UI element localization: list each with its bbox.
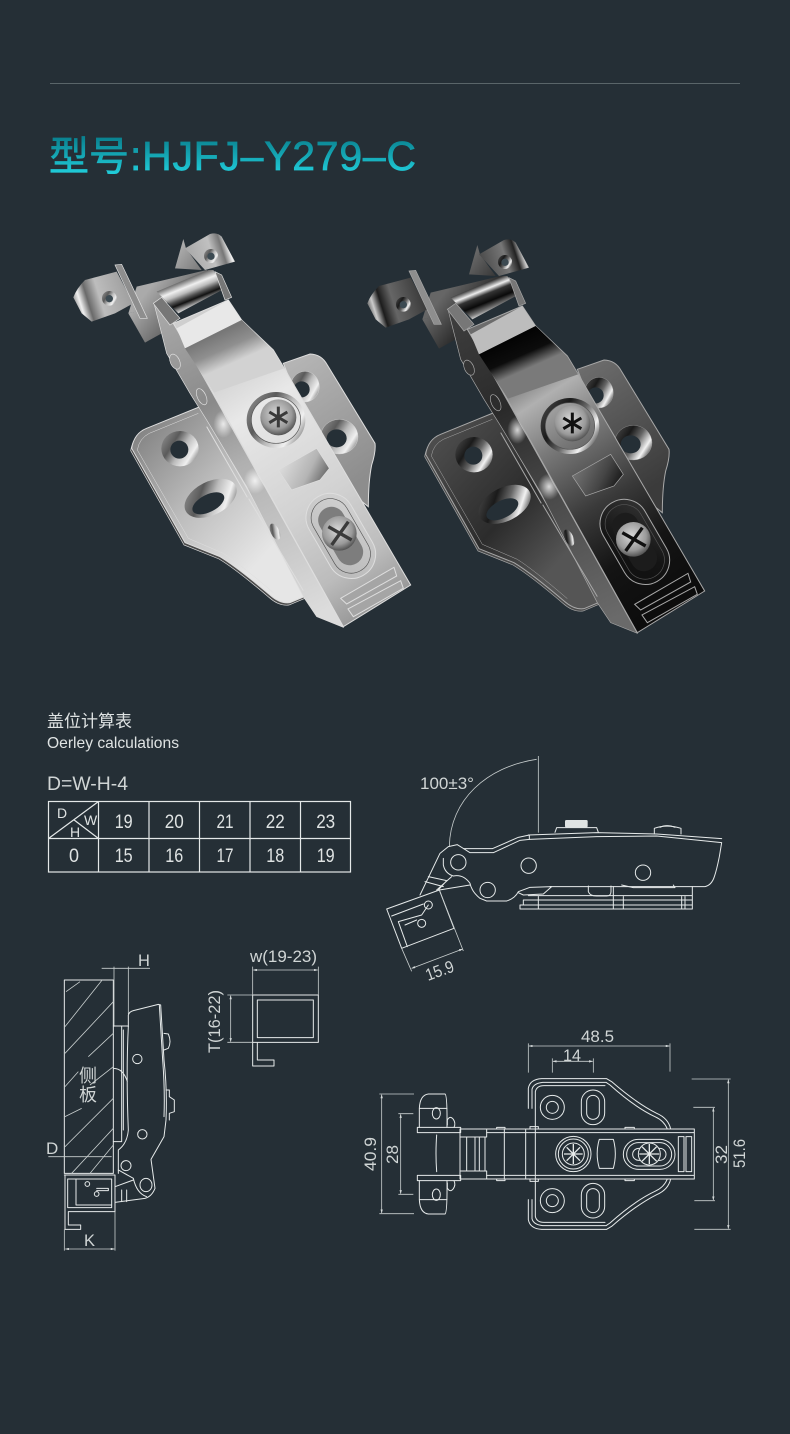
top view drawing with dimensions: 28 [383, 1145, 402, 1164]
top view drawing with dimensions: 14 [563, 1046, 581, 1065]
side view drawing with opening angle [387, 756, 722, 985]
overlay table: 19 [317, 846, 335, 867]
product photo: black nickel hinge [367, 239, 705, 633]
overlay table: 15 [115, 846, 133, 867]
overlay table: 0 [69, 846, 79, 867]
overlay table: 17 [216, 846, 234, 867]
overlay table: 18 [266, 846, 284, 867]
section drawing with side panel: H [138, 952, 150, 970]
overlay table: 21 [216, 812, 234, 833]
side view drawing with opening angle: 100±3° [420, 775, 474, 793]
title: 型号 [49, 135, 129, 179]
overlay table: 22 [266, 812, 285, 833]
overlay table [48, 802, 350, 872]
side view drawing with opening angle: 15.9 [423, 957, 457, 985]
overlay table: 20 [165, 812, 184, 833]
overlay table: 19 [115, 812, 133, 833]
top view drawing with dimensions: 48.5 [581, 1027, 614, 1046]
top divider rule [50, 83, 740, 84]
section drawing with side panel: D [46, 1139, 58, 1158]
section drawing with side panel [46, 952, 174, 1251]
section drawing with side panel: K [84, 1232, 95, 1250]
section drawing with side panel: 板 [79, 1085, 97, 1105]
section drawing with side panel: 侧 [79, 1066, 97, 1086]
overlay calculation heading: Oerley calculations [47, 735, 179, 752]
overlay table: H [70, 824, 80, 840]
overlay calculation heading: 盖位计算表 [47, 712, 132, 731]
product photo: satin nickel hinge [73, 233, 411, 627]
door profile drawing with w and T dimensions: T(16-22) [206, 990, 224, 1053]
formula: D=W-H-4 [47, 774, 128, 795]
top view drawing with dimensions: 51.6 [730, 1139, 749, 1168]
overlay calculation heading [47, 712, 179, 752]
door profile drawing with w and T dimensions [206, 948, 318, 1066]
overlay table: 16 [165, 846, 183, 867]
door profile drawing with w and T dimensions: w(19-23) [249, 948, 317, 966]
overlay table: D [57, 805, 67, 821]
top view drawing with dimensions: 32 [712, 1145, 731, 1164]
overlay table: W [84, 812, 98, 828]
overlay table: 23 [316, 812, 335, 833]
top view drawing with dimensions [361, 1027, 749, 1229]
title: :HJFJ–Y279–C [130, 133, 416, 179]
top view drawing with dimensions: 40.9 [361, 1137, 380, 1171]
